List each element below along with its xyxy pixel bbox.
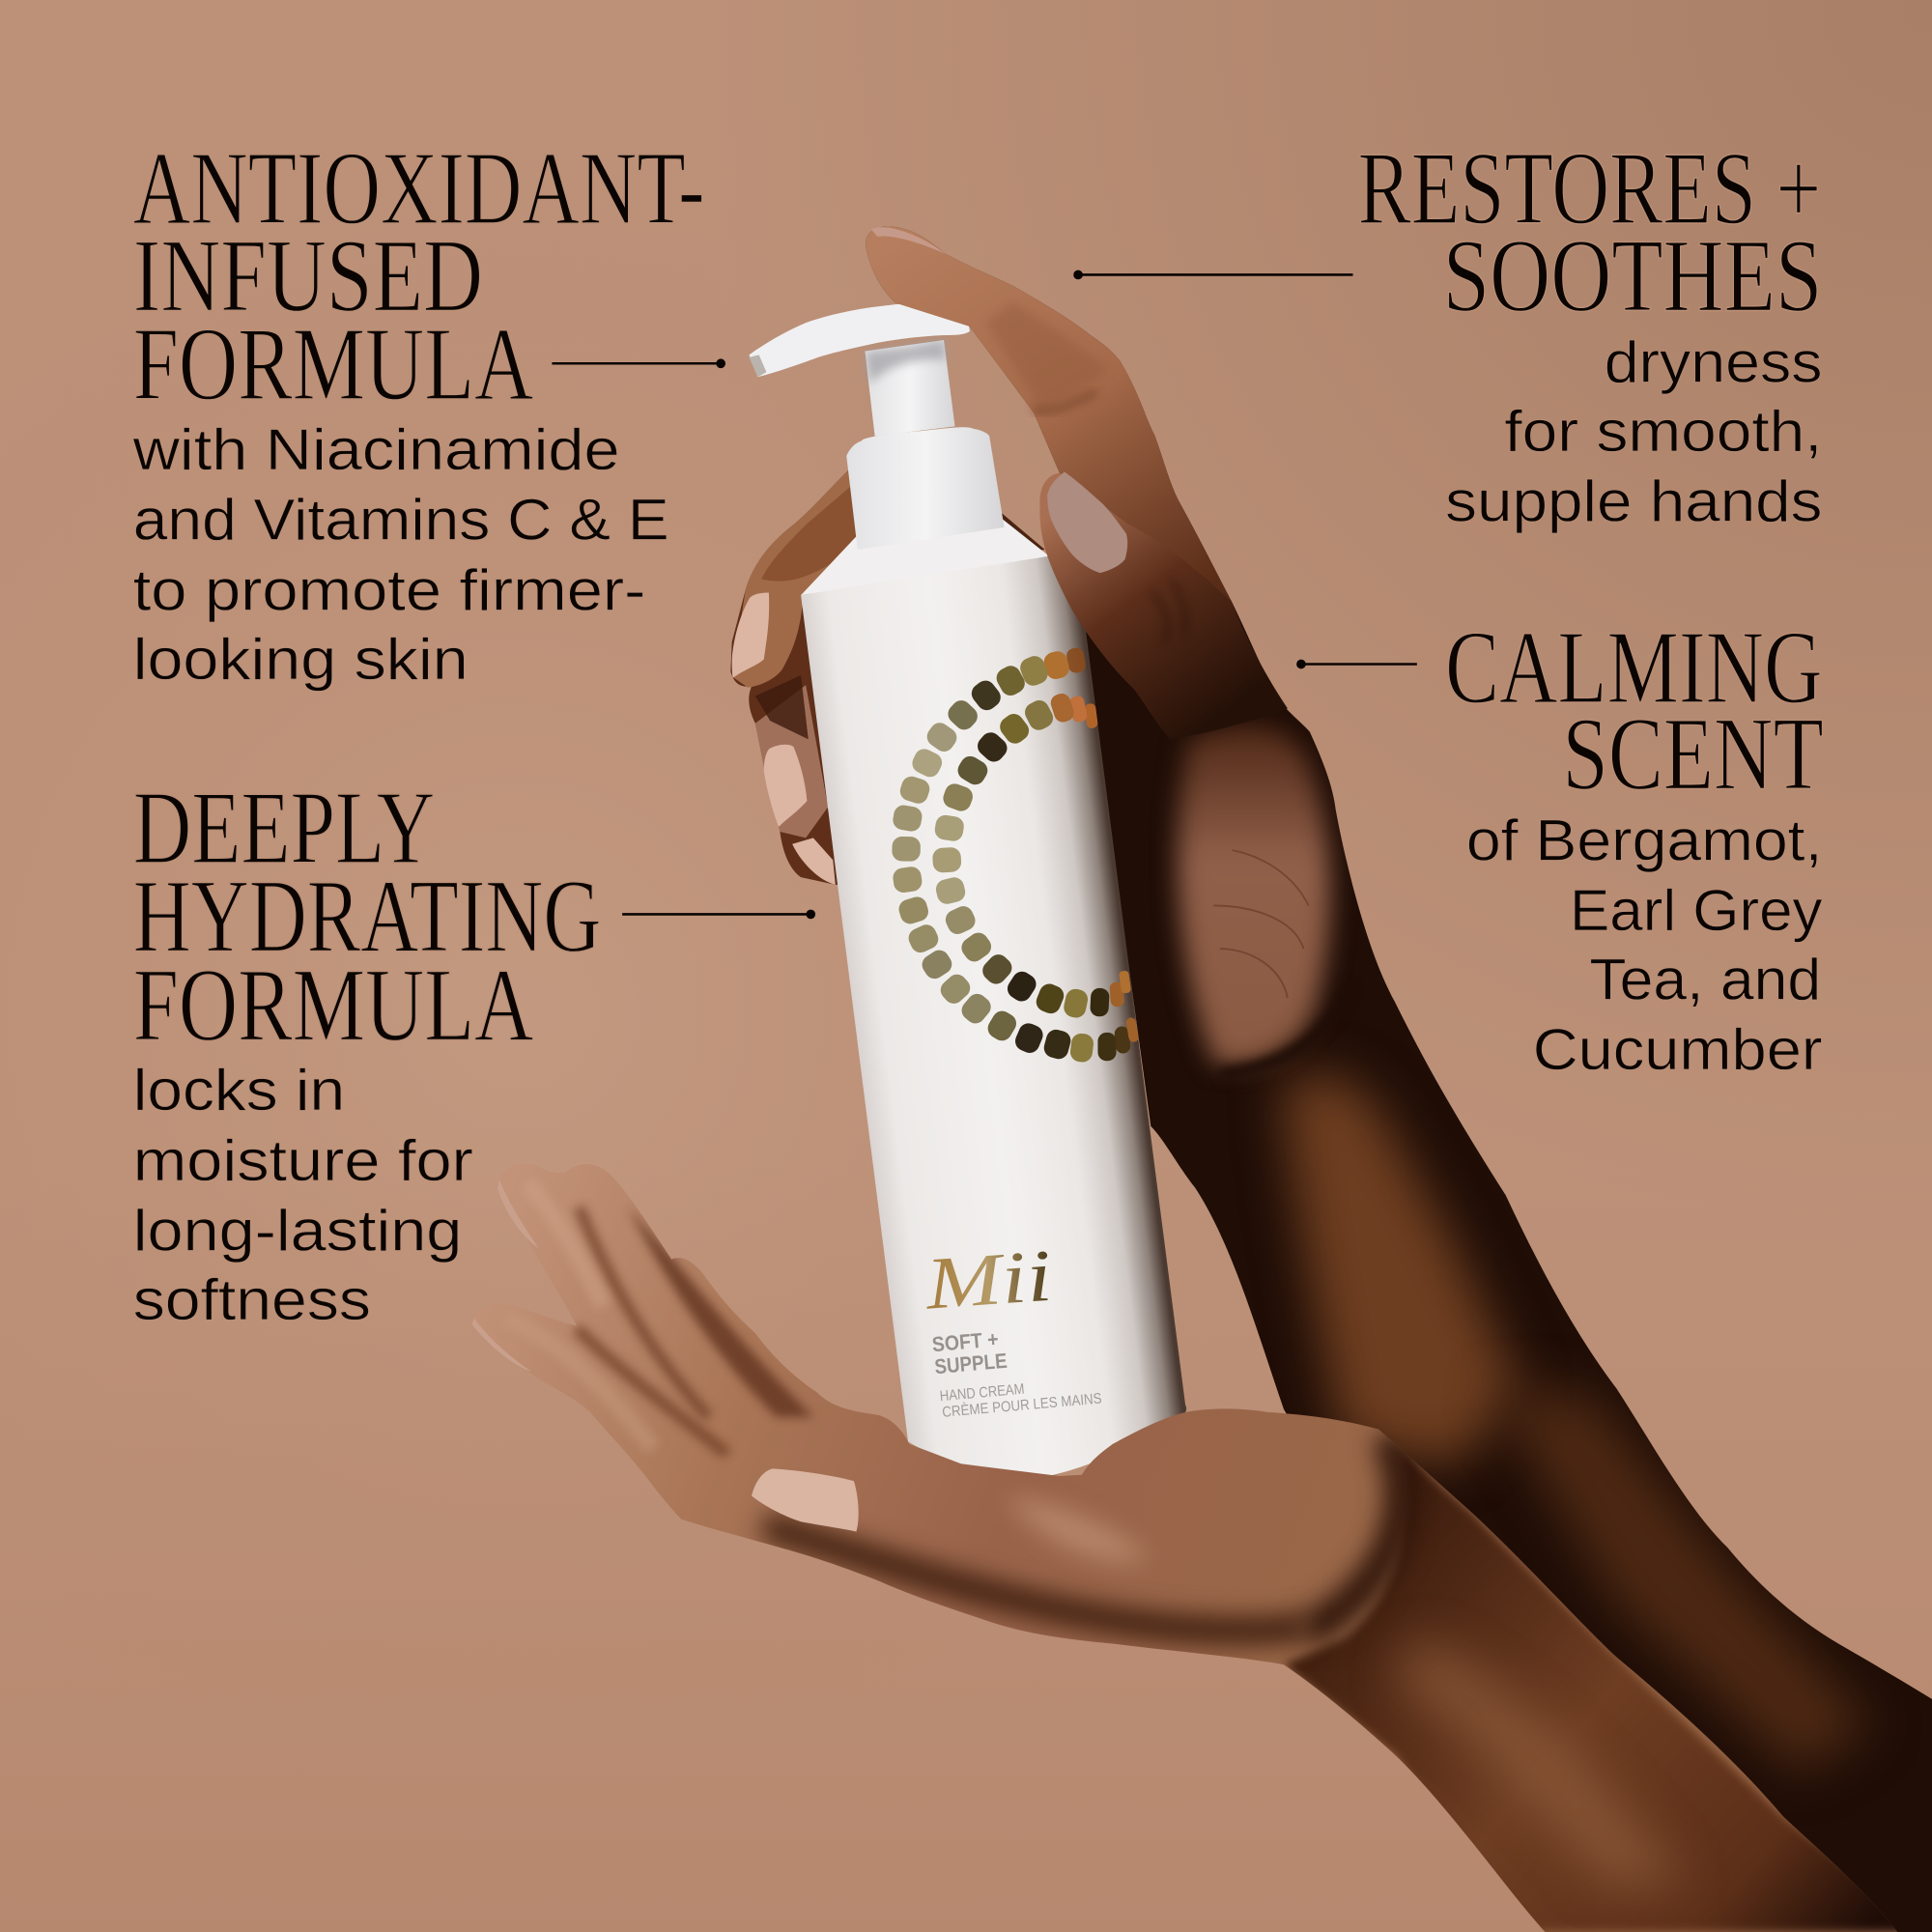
body text: to promote firmer- (133, 557, 645, 622)
finger shadows (629, 1208, 813, 1417)
bottle (750, 301, 1186, 1476)
heading: SCENT (1562, 696, 1824, 811)
lower forearm (1284, 1448, 1932, 1932)
body text: and Vitamins C & E (133, 488, 669, 553)
body text: long-lasting (133, 1199, 462, 1264)
callout: deeply hydrating formula (133, 770, 601, 1332)
leader line: hydrating to bottle (622, 910, 815, 919)
fingertip nails (497, 1179, 538, 1248)
lower hand and forearm (472, 1164, 1932, 1932)
product name: SUPPLE (933, 1349, 1009, 1378)
body text (132, 417, 669, 692)
heading: DEEPLY (133, 770, 435, 886)
heading: HYDRATING (133, 859, 601, 975)
thumb nail (1047, 472, 1127, 573)
lower thumb nail (752, 1468, 859, 1531)
body text: Earl Grey (1570, 878, 1823, 943)
logo: Mii: Mii (922, 1235, 1054, 1325)
heading: FORMULA (133, 306, 533, 422)
body text (1466, 808, 1823, 1082)
body text: looking skin (133, 627, 469, 692)
product name: SOFT + (931, 1326, 1000, 1356)
leader line: antioxidant to pump (552, 358, 725, 368)
callout: restores + soothes (1358, 130, 1822, 534)
body text: of Bergamot, (1466, 808, 1822, 872)
heading (1445, 610, 1824, 811)
back fingers of the upper hand (730, 469, 1045, 887)
heading: FORMULA (133, 948, 533, 1064)
product name (931, 1326, 1009, 1378)
fingernails (732, 593, 836, 885)
body text: Tea, and (1589, 947, 1821, 1011)
forearm highlight (1282, 1074, 1521, 1466)
heading: SOOTHES (1443, 217, 1822, 333)
callout: antioxidant-infused formula (132, 130, 705, 692)
body text: supple hands (1445, 469, 1822, 534)
body text: locks in (133, 1058, 345, 1122)
upper hand and forearm (866, 227, 1932, 1932)
body text: Cucumber (1533, 1017, 1822, 1082)
heading (1358, 130, 1822, 333)
body text: with Niacinamide (132, 417, 620, 482)
product descriptor: CRÈME POUR LES MAINS (942, 1390, 1102, 1421)
heading (133, 770, 601, 1064)
body text: moisture for (133, 1128, 473, 1193)
heading: INFUSED (133, 217, 483, 333)
leader line: restores to fingers (1073, 270, 1353, 279)
heading (133, 130, 705, 422)
callout: calming scent (1445, 610, 1824, 1082)
pump dispenser (750, 301, 1076, 595)
gold dot ring (892, 647, 1139, 1064)
heading: CALMING (1445, 610, 1822, 725)
body text: softness (133, 1267, 371, 1332)
body text (1445, 329, 1822, 534)
body text: for smooth, (1504, 399, 1822, 464)
body text (133, 1058, 473, 1332)
heading: ANTIOXIDANT- (133, 130, 705, 246)
product descriptor: HAND CREAM (939, 1381, 1025, 1405)
palm shading (1306, 1435, 1401, 1633)
leader line: calming scent to hand (1296, 660, 1417, 668)
body text: dryness (1605, 329, 1822, 394)
palm (1178, 725, 1330, 1065)
index finger and thumb over the bottle (866, 227, 1288, 739)
